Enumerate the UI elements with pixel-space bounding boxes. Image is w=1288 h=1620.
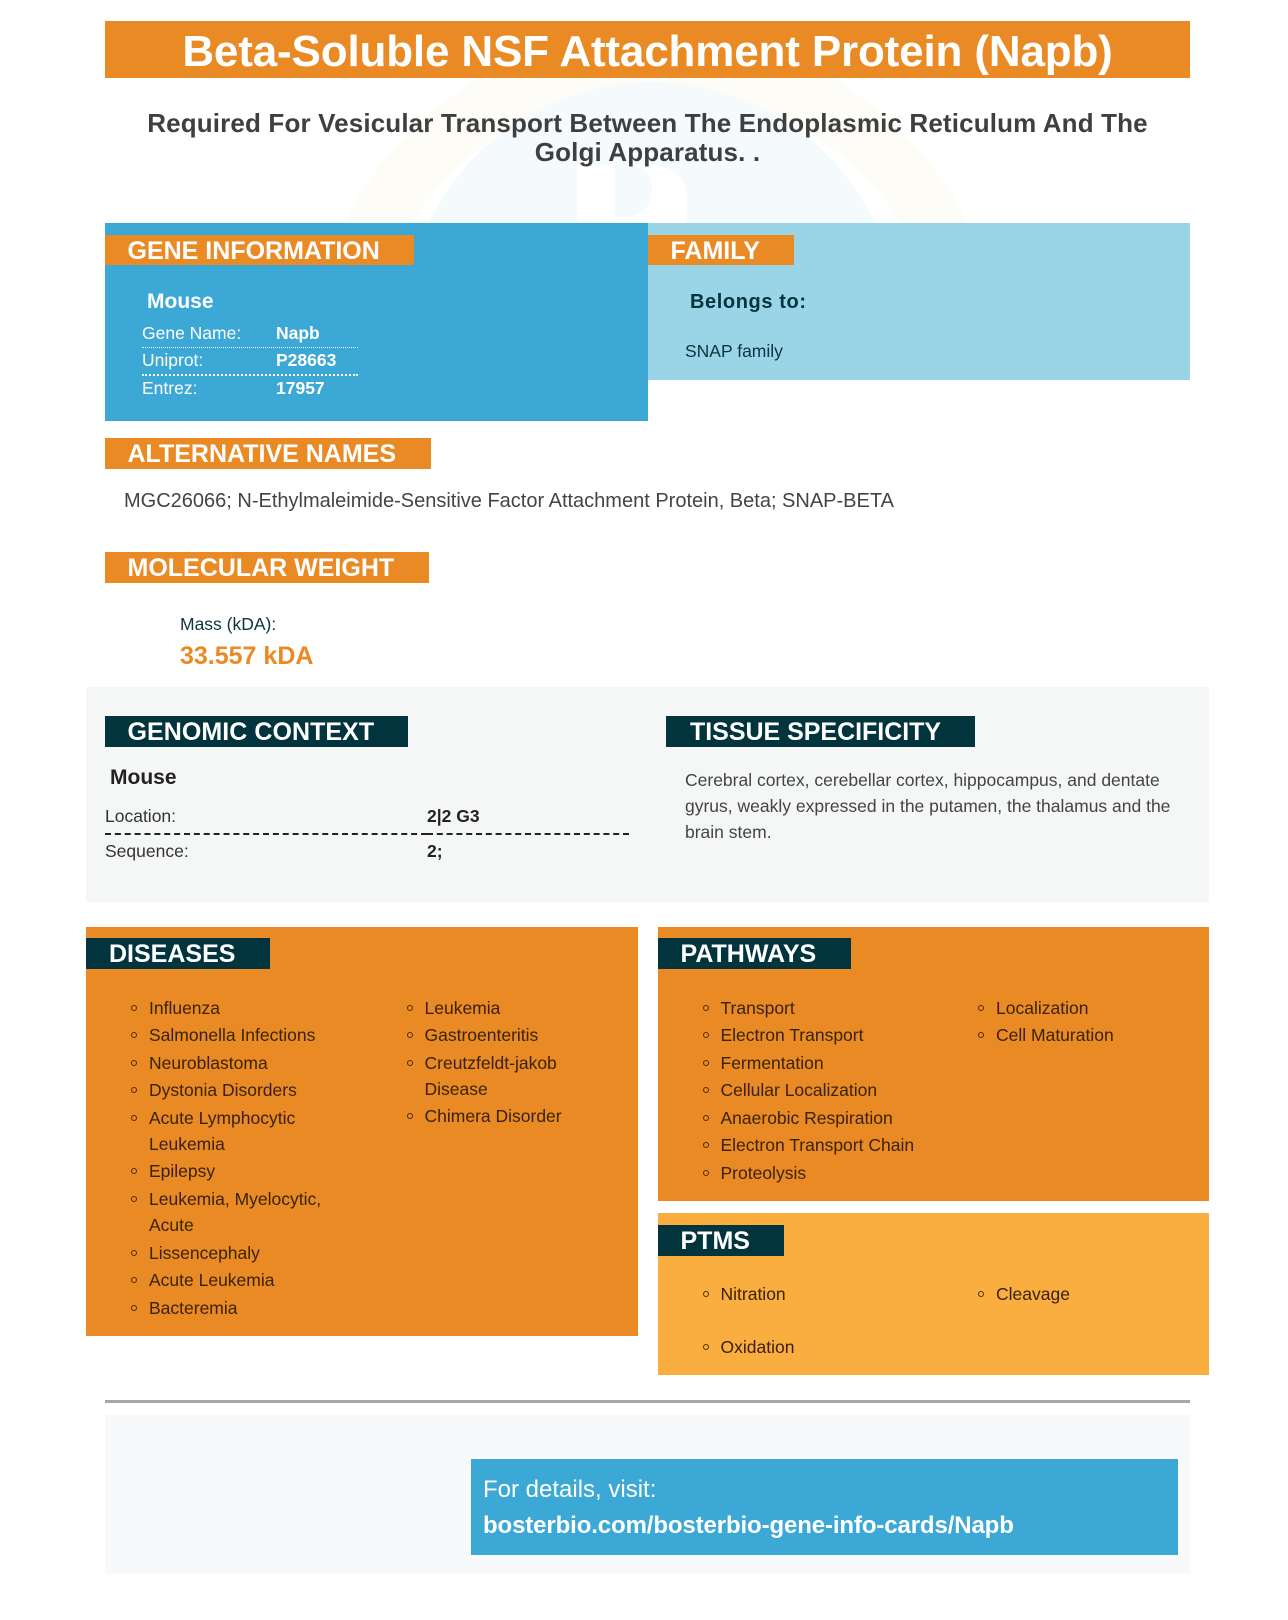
panel: diseases <box>86 927 638 1336</box>
sequence row: Sequence: <box>105 841 189 861</box>
heading: family: FAMILY <box>670 237 760 265</box>
entrez row <box>142 378 325 398</box>
ptms list <box>703 1284 1070 1357</box>
pathways list: Localization <box>996 998 1088 1018</box>
heading: genomic context: GENOMIC CONTEXT <box>128 718 374 746</box>
uniprot row <box>142 348 358 376</box>
diseases list: Disease <box>424 1079 488 1099</box>
heading: pathways <box>658 938 851 969</box>
gene name row: Gene Name: <box>142 323 241 343</box>
callout: details link: bosterbio.com/bosterbio-gene-info-cards/Napb <box>483 1512 1014 1539</box>
diseases list: Epilepsy <box>149 1161 215 1181</box>
diseases list: Bacteremia <box>149 1298 238 1318</box>
diseases list: Acute Lymphocytic <box>149 1108 295 1128</box>
heading: pathways: PATHWAYS <box>680 940 816 968</box>
uniprot row: P28663 <box>276 350 336 370</box>
mass label: Mass (kDA): <box>180 614 276 634</box>
sequence row: 2; <box>427 841 443 861</box>
species label: Mouse <box>110 766 177 789</box>
uniprot row: Uniprot: <box>142 350 203 370</box>
location row: 2|2 G3 <box>427 806 480 826</box>
heading: gene information: GENE INFORMATION <box>128 237 380 265</box>
diseases list: Gastroenteritis <box>424 1025 538 1045</box>
panel: family <box>648 223 1190 380</box>
diseases list: Salmonella Infections <box>149 1025 315 1045</box>
heading: ptms: PTMS <box>680 1227 750 1255</box>
panel: gene information <box>105 223 648 421</box>
pathways list: Proteolysis <box>720 1163 806 1183</box>
gene name row: Napb <box>276 323 320 343</box>
tissue specificity text: brain stem. <box>685 822 772 842</box>
ptms list: Nitration <box>720 1284 786 1304</box>
panel: ptms <box>658 1213 1209 1375</box>
heading: diseases <box>86 938 270 969</box>
alternative names text: MGC26066; N-Ethylmaleimide-Sensitive Factor Attachment Protein, Beta; SNAP-BETA <box>124 490 894 512</box>
entrez row: Entrez: <box>142 378 197 398</box>
belongs to label: Belongs to: <box>690 291 807 313</box>
pathways list: Anaerobic Respiration <box>720 1108 893 1128</box>
panel: footer <box>105 1415 1190 1574</box>
heading: tissue specificity: TISSUE SPECIFICITY <box>690 718 941 746</box>
watermark logo <box>344 78 968 223</box>
diseases list: Leukemia <box>149 1134 225 1154</box>
pathways list: Transport <box>720 998 795 1018</box>
pathways list: Fermentation <box>720 1053 824 1073</box>
sequence row <box>105 841 443 861</box>
mass value: 33.557 kDA <box>180 642 313 670</box>
panel: pathways <box>658 927 1209 1201</box>
diseases list <box>131 998 562 1318</box>
diseases list: Influenza <box>149 998 220 1018</box>
pathways list: Electron Transport <box>720 1025 863 1045</box>
tissue specificity text <box>685 770 1170 842</box>
species label: Mouse <box>147 290 214 313</box>
tissue specificity text: Cerebral cortex, cerebellar cortex, hippocampus, and dentate <box>685 770 1160 790</box>
heading: molecular weight: MOLECULAR WEIGHT <box>128 554 394 582</box>
gene name row <box>142 320 358 348</box>
location row: Location: <box>105 806 176 826</box>
diseases list: Dystonia Disorders <box>149 1080 297 1100</box>
pathways list: Cell Maturation <box>996 1025 1114 1045</box>
heading: family <box>648 235 794 265</box>
heading: diseases: DISEASES <box>109 940 235 968</box>
subtitle: Golgi Apparatus. . <box>535 137 760 167</box>
diseases list: Creutzfeldt-jakob <box>424 1053 557 1073</box>
pathways list: Electron Transport Chain <box>720 1135 914 1155</box>
callout: details link <box>471 1459 1178 1555</box>
pathways list <box>703 998 1114 1183</box>
panel: genomic context and tissue specificity <box>86 687 1209 902</box>
entrez row: 17957 <box>276 378 325 398</box>
tissue specificity text: gyrus, weakly expressed in the putamen, the thalamus and the <box>685 796 1170 816</box>
subtitle <box>147 108 1148 167</box>
ptms list: Oxidation <box>720 1337 794 1357</box>
pathways list: Cellular Localization <box>720 1080 877 1100</box>
diseases list: Chimera Disorder <box>424 1106 562 1126</box>
heading: alternative names: ALTERNATIVE NAMES <box>128 440 396 468</box>
subtitle: Required For Vesicular Transport Between The Endoplasmic Reticulum And The <box>147 108 1148 138</box>
heading: ptms <box>658 1225 784 1256</box>
diseases list: Acute <box>149 1215 194 1235</box>
callout: details link: For details, visit: <box>483 1476 656 1503</box>
diseases list: Lissencephaly <box>149 1243 260 1263</box>
diseases list: Acute Leukemia <box>149 1270 274 1290</box>
diseases list: Neuroblastoma <box>149 1053 268 1073</box>
location row <box>105 806 629 835</box>
ptms list: Cleavage <box>996 1284 1070 1304</box>
diseases list: Leukemia, Myelocytic, <box>149 1189 321 1209</box>
family value: SNAP family <box>685 341 783 361</box>
title banner: Beta-Soluble NSF Attachment Protein (Napb) <box>182 27 1113 76</box>
diseases list: Leukemia <box>424 998 500 1018</box>
